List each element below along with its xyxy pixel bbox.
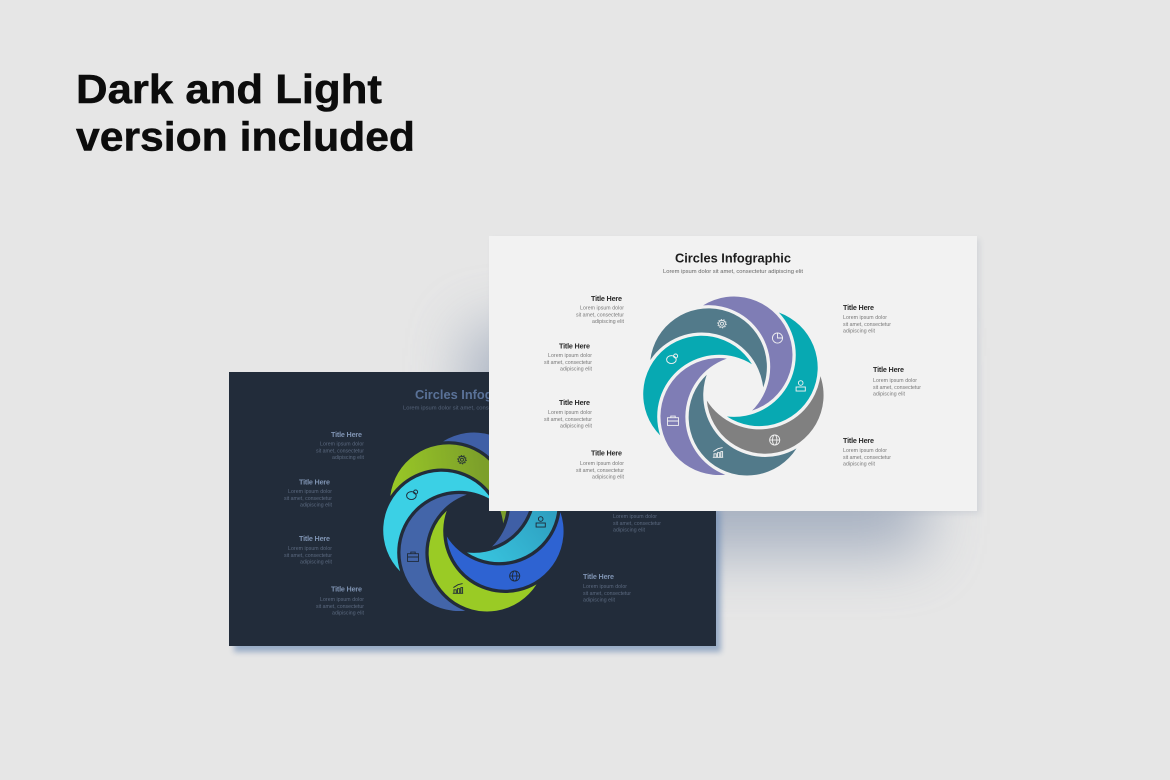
light labels right: sit amet, consectetur — [843, 455, 891, 461]
light labels left: adipiscing elit — [560, 424, 593, 430]
dark labels right: Lorem ipsum dolor — [613, 514, 657, 520]
light labels right — [843, 303, 921, 468]
dark title: Circles Infographic — [415, 387, 531, 402]
dark labels left: Title Here — [299, 534, 330, 543]
light icons — [667, 319, 805, 457]
light labels left: Title Here — [559, 342, 590, 350]
dark labels left: sit amet, consectetur — [284, 553, 332, 559]
dark labels left: Lorem ipsum dolor — [288, 546, 332, 552]
heading: Dark and Light — [76, 66, 382, 112]
panel: dark slide — [229, 372, 716, 646]
light labels left: Lorem ipsum dolor — [548, 353, 592, 359]
panel: light slide — [489, 236, 977, 511]
dark labels right: Title Here — [583, 572, 614, 581]
dark labels left: sit amet, consectetur — [316, 448, 364, 454]
dark labels left: sit amet, consectetur — [316, 604, 364, 610]
heading — [76, 66, 415, 160]
light labels left: sit amet, consectetur — [576, 468, 624, 474]
light labels left: adipiscing elit — [592, 474, 625, 480]
light labels right: adipiscing elit — [843, 328, 876, 334]
light labels right: Title Here — [873, 365, 904, 374]
light labels right: adipiscing elit — [843, 462, 876, 468]
dark labels left: Lorem ipsum dolor — [320, 597, 364, 603]
light labels right: adipiscing elit — [873, 392, 906, 398]
dark labels right — [583, 514, 661, 604]
dark labels right: sit amet, consectetur — [583, 591, 631, 597]
dark labels left: adipiscing elit — [300, 502, 333, 508]
light labels left: adipiscing elit — [592, 319, 625, 325]
dark swirl chart — [372, 421, 581, 631]
card shadows — [234, 239, 980, 652]
light subtitle: Lorem ipsum dolor sit amet, consectetur adipiscing elit — [663, 269, 803, 275]
light swirl chart — [632, 285, 841, 495]
dark labels right: Lorem ipsum dolor — [583, 584, 627, 590]
light labels left: sit amet, consectetur — [544, 360, 592, 366]
light labels left: Lorem ipsum dolor — [580, 461, 624, 467]
dark labels right: adipiscing elit — [613, 528, 646, 534]
dark labels left: adipiscing elit — [332, 610, 365, 616]
dark labels left: Lorem ipsum dolor — [320, 442, 364, 448]
light labels right: Lorem ipsum dolor — [873, 378, 917, 384]
light labels left: sit amet, consectetur — [544, 417, 592, 423]
light labels left: sit amet, consectetur — [576, 312, 624, 318]
dark labels left: adipiscing elit — [300, 560, 333, 566]
dark labels left: Lorem ipsum dolor — [288, 489, 332, 495]
dark labels left: adipiscing elit — [332, 455, 365, 461]
light labels right: Lorem ipsum dolor — [843, 315, 887, 321]
light labels right: sit amet, consectetur — [843, 322, 891, 328]
dark labels left — [284, 430, 365, 616]
dark labels right: adipiscing elit — [583, 598, 616, 604]
light labels right: Title Here — [843, 303, 874, 312]
dark icons — [407, 455, 545, 593]
light labels left: adipiscing elit — [560, 366, 593, 372]
light labels right: sit amet, consectetur — [873, 385, 921, 391]
heading: version included — [76, 114, 415, 160]
light labels right: Title Here — [843, 436, 874, 445]
dark labels right: sit amet, consectetur — [613, 521, 661, 527]
light title: Circles Infographic — [675, 250, 791, 266]
dark labels left: Title Here — [331, 430, 362, 439]
light labels left — [544, 294, 625, 480]
dark labels left: Title Here — [331, 584, 362, 594]
light labels left: Title Here — [591, 448, 622, 458]
light labels left: Lorem ipsum dolor — [580, 306, 624, 312]
light labels left: Title Here — [559, 398, 590, 407]
light labels left: Lorem ipsum dolor — [548, 410, 592, 416]
light labels left: Title Here — [591, 294, 622, 303]
dark subtitle: Lorem ipsum dolor sit amet, consectetur adipiscing elit — [403, 406, 543, 412]
light labels right: Lorem ipsum dolor — [843, 448, 887, 454]
dark labels left: Title Here — [299, 478, 330, 486]
dark labels left: sit amet, consectetur — [284, 496, 332, 502]
